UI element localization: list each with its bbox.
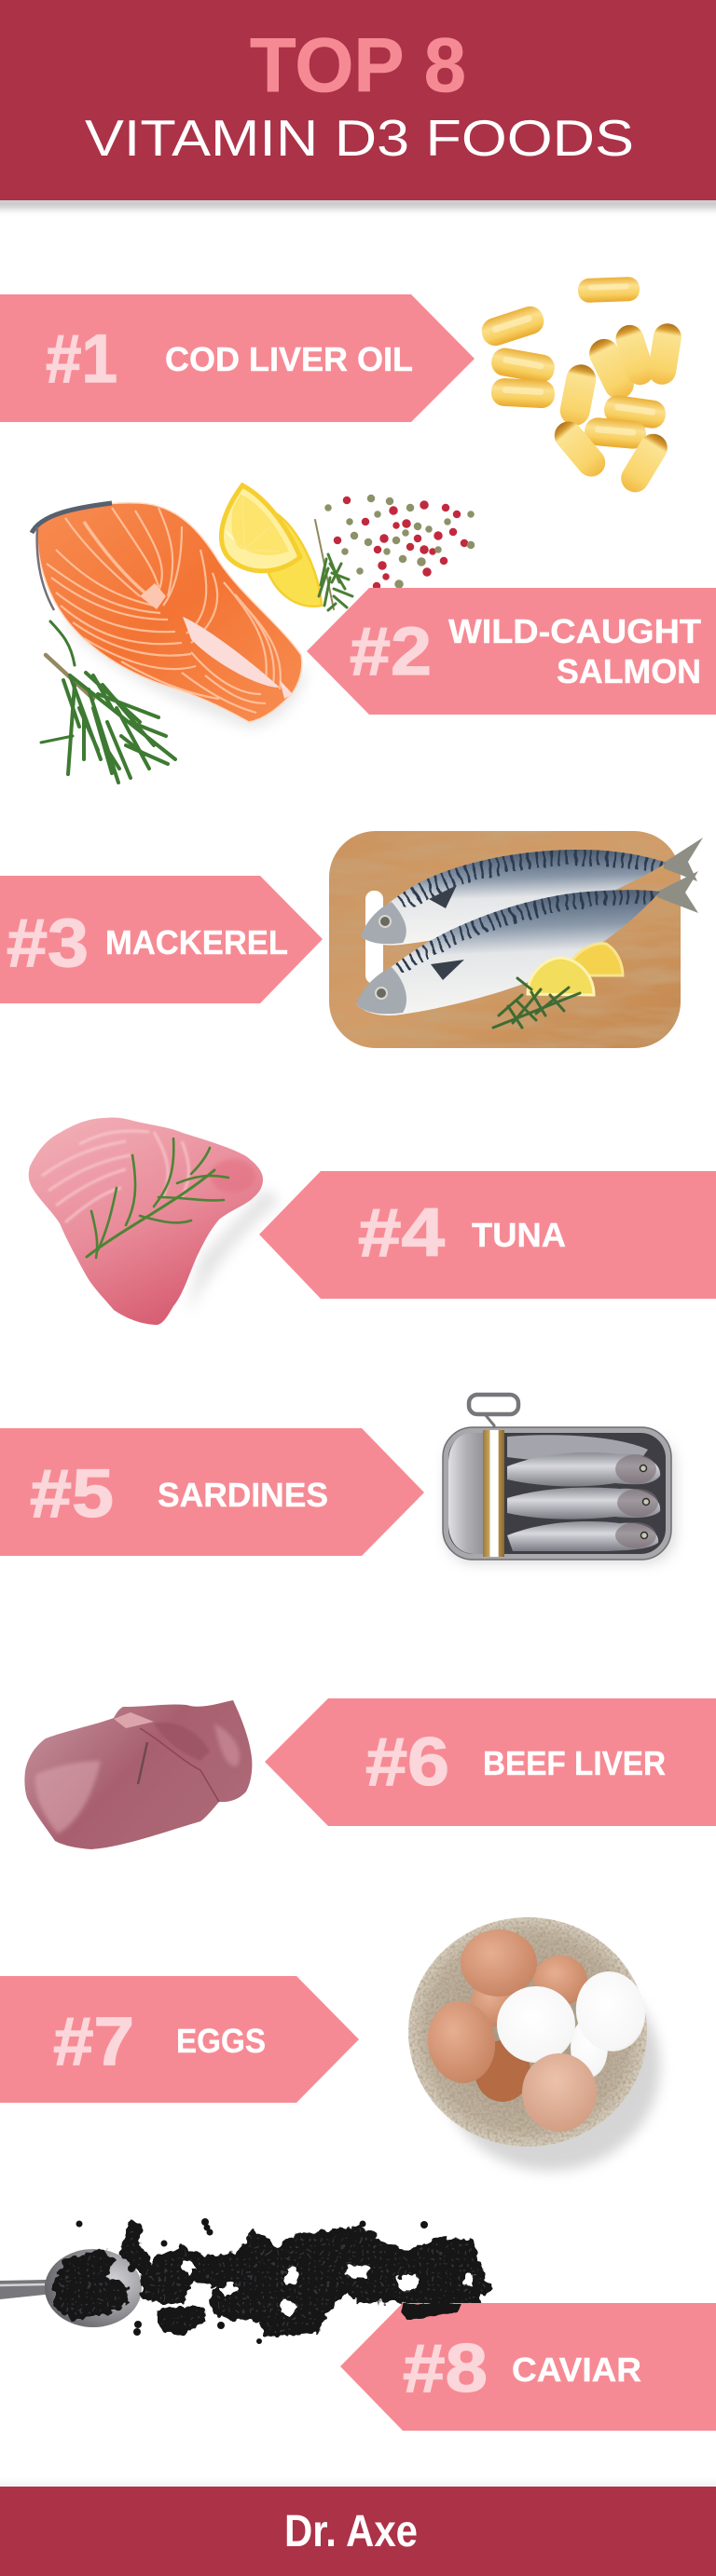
banner 1: cod liver oil: COD LIVER OIL xyxy=(165,340,413,378)
flesh lines xyxy=(42,1131,188,1222)
banner 5: sardines xyxy=(0,1428,424,1556)
liver lobes and highlights xyxy=(140,1728,219,1802)
banner 5: sardines: SARDINES xyxy=(158,1476,328,1514)
icon: beef liver xyxy=(24,1700,252,1849)
icon: tin of sardines xyxy=(443,1395,675,1563)
icon: cod liver oil capsules xyxy=(478,277,683,497)
brand name: Dr. Axe xyxy=(284,2507,418,2556)
sardines xyxy=(507,1435,660,1551)
banner 7: eggs xyxy=(0,1976,359,2103)
icon: mackerel on cutting board xyxy=(329,831,703,1048)
peppercorns xyxy=(325,496,474,589)
banner 2: wild-caught salmon: SALMON xyxy=(557,652,701,690)
banner 6: beef liver xyxy=(265,1698,716,1826)
bowl shadow xyxy=(440,1962,660,2171)
spoon bowl xyxy=(45,2249,142,2327)
title: top 8: TOP 8 xyxy=(250,21,466,108)
icon: tuna steak with rosemary xyxy=(29,1117,280,1325)
banner 2: wild-caught salmon xyxy=(307,588,716,715)
banner 6: beef liver: BEEF LIVER xyxy=(483,1744,666,1782)
icon: salmon steak with lemon, rosemary and peppercorns xyxy=(32,485,474,783)
lemon slices xyxy=(566,944,623,975)
salmon shadow xyxy=(56,615,308,729)
banner 3: mackerel xyxy=(0,876,323,1003)
icon: bowl of eggs xyxy=(408,1917,660,2171)
subtitle: VITAMIN D3 FOODS xyxy=(85,109,634,167)
banner 7: eggs: EGGS xyxy=(176,2022,266,2060)
banner 1: cod liver oil: #1 xyxy=(46,321,117,397)
loose roe xyxy=(76,2218,481,2344)
gaps in the roe xyxy=(183,2260,474,2313)
caviar mass xyxy=(56,2224,490,2334)
can lid xyxy=(448,1433,484,1554)
banner 3: mackerel: #3 xyxy=(7,906,89,981)
bowl xyxy=(408,1917,647,2147)
banner 8: caviar: CAVIAR xyxy=(512,2351,641,2389)
big rosemary sprig xyxy=(41,621,175,783)
banner 8: caviar: #8 xyxy=(403,2331,488,2406)
can shadow xyxy=(446,1437,675,1563)
roe over banner edge xyxy=(401,2303,461,2320)
cutting board xyxy=(329,831,681,1048)
flesh stripes xyxy=(47,508,281,713)
banner 2: wild-caught salmon: WILD-CAUGHT xyxy=(448,612,701,650)
banner 4: tuna: TUNA xyxy=(472,1216,566,1254)
dill xyxy=(493,978,580,1028)
eggs xyxy=(422,1929,652,2132)
rosemary on tuna xyxy=(87,1138,228,1258)
pull ring xyxy=(469,1395,518,1435)
header band xyxy=(0,0,716,209)
fish 1 xyxy=(361,838,703,946)
icon: caviar on a spoon xyxy=(0,2218,490,2344)
banner 1: cod liver oil xyxy=(0,294,475,422)
banner 7: eggs: #7 xyxy=(53,2004,134,2079)
banner 5: sardines: #5 xyxy=(30,1456,114,1532)
banner 8: caviar xyxy=(340,2303,716,2431)
banner 4: tuna xyxy=(259,1171,716,1299)
banner 4: tuna: #4 xyxy=(358,1195,445,1271)
lemon slices xyxy=(221,485,322,607)
can body xyxy=(443,1427,671,1560)
footer band xyxy=(0,2483,716,2576)
spoon handle xyxy=(0,2277,56,2299)
gold band xyxy=(483,1430,504,1557)
salmon centre bone xyxy=(140,583,166,609)
banner 3: mackerel: MACKEREL xyxy=(105,923,288,961)
salmon steak xyxy=(37,503,302,722)
banner 6: beef liver: #6 xyxy=(365,1724,449,1800)
banner 2: wild-caught salmon: #2 xyxy=(350,614,432,689)
fish 2 xyxy=(356,871,698,1015)
small rosemary xyxy=(315,520,352,610)
